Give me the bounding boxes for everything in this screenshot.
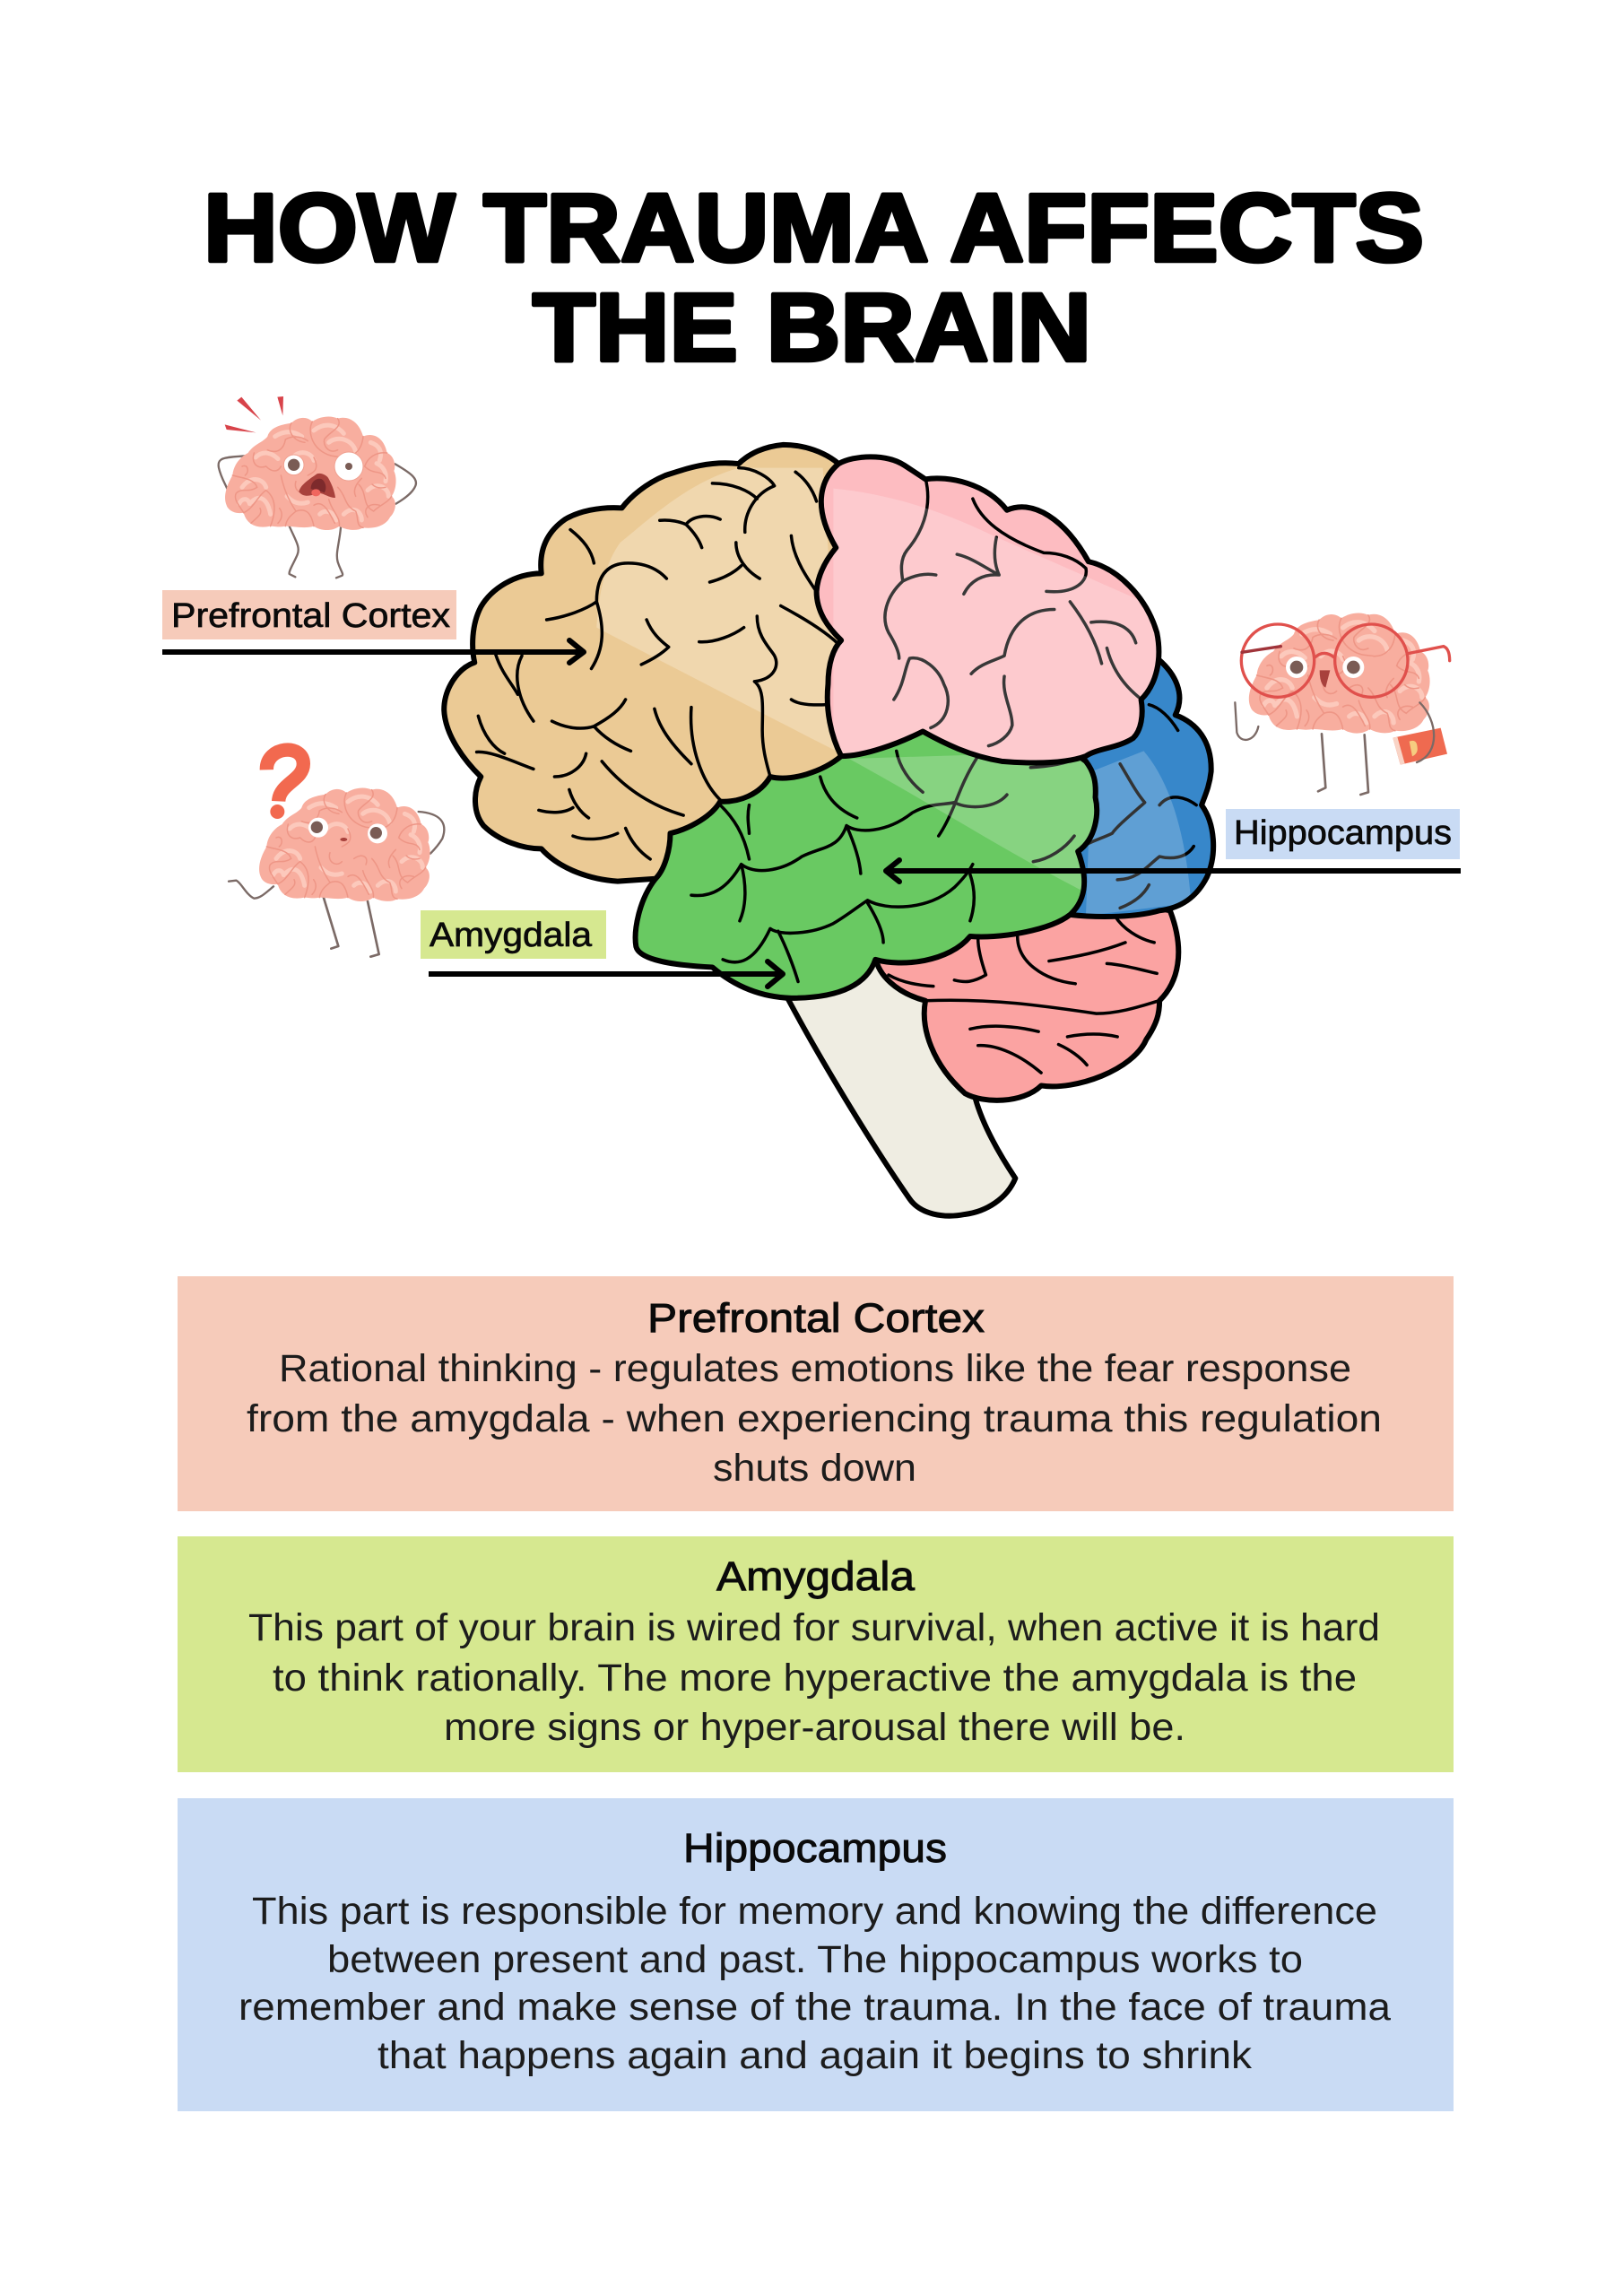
icon: alarm spikes xyxy=(225,396,283,432)
brain stem xyxy=(787,967,1015,1216)
description: hippocampus: that happens again and again it begins to shrink xyxy=(378,2034,1253,2077)
mascot: studious brain with glasses xyxy=(1235,613,1450,795)
label: amygdala: Amygdala xyxy=(430,917,593,954)
description: prefrontal cortex: Rational thinking - regulates emotions like the fear response xyxy=(279,1347,1351,1390)
arms and legs xyxy=(1235,702,1368,795)
description: hippocampus xyxy=(239,1890,1391,2077)
title: HOW TRAUMA AFFECTS xyxy=(204,173,1424,282)
infographic page xyxy=(162,191,1461,2111)
description: hippocampus: remember and make sense of the trauma. In the face of trauma xyxy=(239,1986,1391,2029)
description: amygdala: to think rationally. The more hyperactive the amygdala is the xyxy=(273,1657,1357,1700)
icon: question mark xyxy=(266,750,303,819)
eyes and mouth xyxy=(1286,657,1364,688)
eyes and mouth xyxy=(283,452,363,498)
prefrontal cortex lobe (tan) xyxy=(444,445,886,882)
arms and legs xyxy=(219,456,416,578)
eyes and mouth xyxy=(308,818,387,843)
description: amygdala: This part of your brain is wired for survival, when active it is hard xyxy=(248,1606,1380,1649)
heading: amygdala: Amygdala xyxy=(716,1553,916,1599)
heading: prefrontal cortex: Prefrontal Cortex xyxy=(647,1295,985,1341)
label: prefrontal cortex xyxy=(162,590,456,639)
arms and legs xyxy=(229,812,444,957)
arrow: prefrontal cortex xyxy=(162,640,584,663)
arrow: hippocampus xyxy=(886,860,1461,882)
mascot: startled brain xyxy=(219,396,416,578)
label: hippocampus: Hippocampus xyxy=(1234,814,1452,852)
panel: amygdala xyxy=(178,1536,1454,1772)
title xyxy=(204,173,1424,381)
parietal lobe (pink) xyxy=(814,454,1162,766)
description: prefrontal cortex: from the amygdala - when experiencing trauma this regulation xyxy=(247,1397,1382,1440)
arrow: amygdala xyxy=(429,961,783,987)
hippocampus lobe (blue) xyxy=(1070,659,1213,917)
description: prefrontal cortex xyxy=(247,1347,1382,1490)
icon: book xyxy=(1393,702,1447,765)
panel: prefrontal cortex xyxy=(178,1276,1454,1511)
heading: hippocampus: Hippocampus xyxy=(683,1825,947,1871)
description: amygdala xyxy=(248,1606,1380,1749)
brain diagram xyxy=(444,445,1213,1216)
label: amygdala xyxy=(421,910,606,959)
description: amygdala: more signs or hyper-arousal there will be. xyxy=(444,1706,1185,1749)
label: hippocampus xyxy=(1226,809,1460,859)
icon: glasses xyxy=(1241,624,1450,697)
description: hippocampus: between present and past. The hippocampus works to xyxy=(327,1938,1303,1981)
description: prefrontal cortex: shuts down xyxy=(713,1447,916,1490)
amygdala lobe (green) xyxy=(636,730,1097,998)
panel: hippocampus xyxy=(178,1798,1454,2111)
label: prefrontal cortex: Prefrontal Cortex xyxy=(171,597,450,635)
title: THE BRAIN xyxy=(533,273,1091,381)
cerebellum xyxy=(875,885,1178,1100)
description: hippocampus: This part is responsible for memory and knowing the difference xyxy=(252,1890,1377,1933)
mascot: confused brain xyxy=(229,750,444,957)
